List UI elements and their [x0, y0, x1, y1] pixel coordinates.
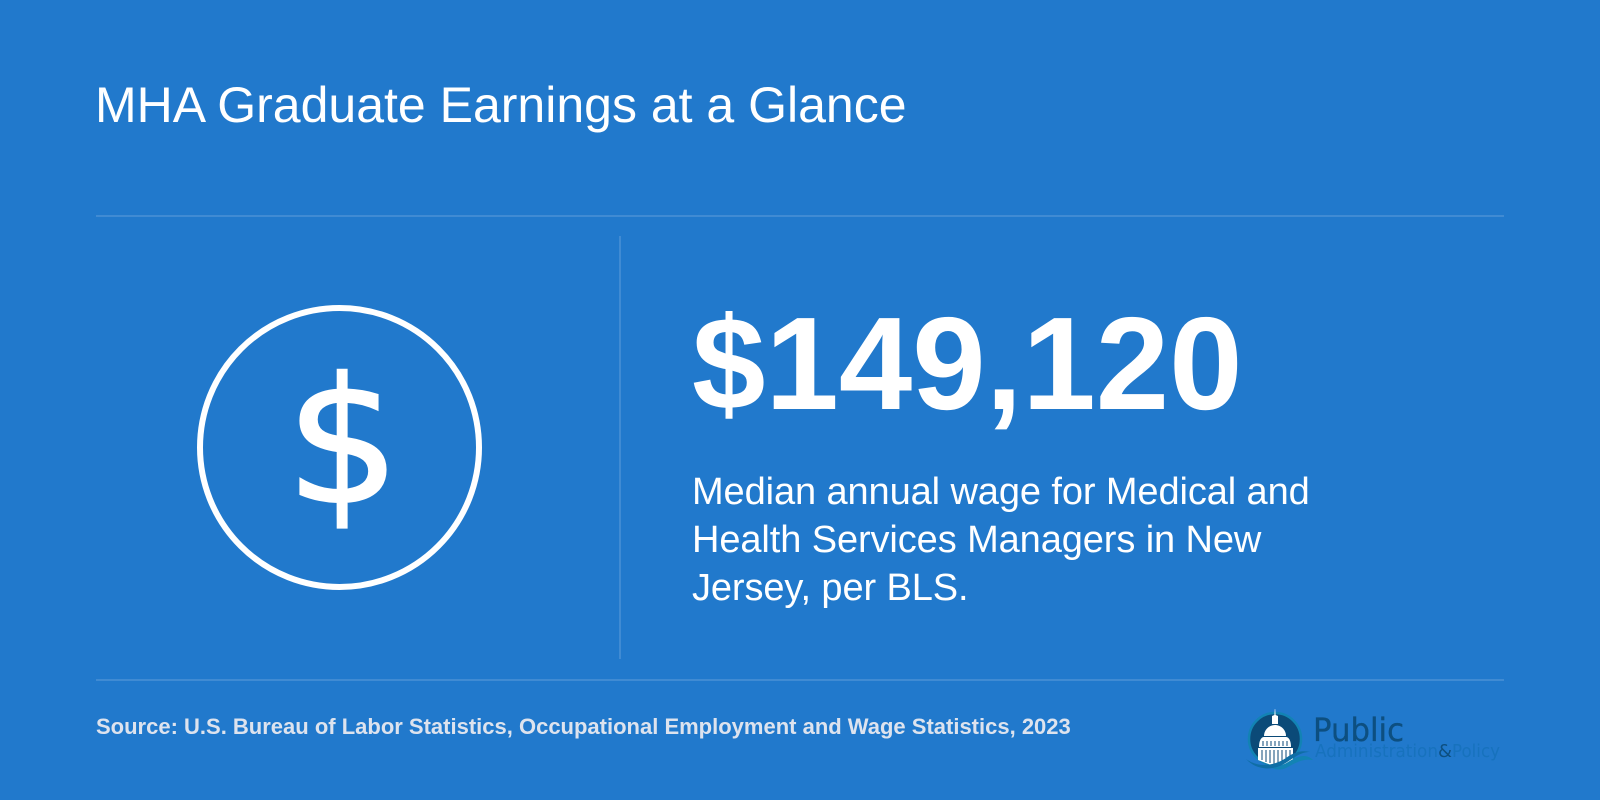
title: MHA Graduate Earnings at a Glance [95, 77, 907, 133]
logo ampersand: & [1438, 741, 1452, 762]
logo word: Public: Public [1313, 711, 1404, 749]
logo: Public Administration & Policy [1246, 709, 1500, 770]
icon: dollar sign in circle: $ [285, 340, 401, 543]
wage description: Jersey, per BLS. [692, 567, 968, 609]
wage description: Median annual wage for Medical and [692, 471, 1310, 513]
source note: Source: U.S. Bureau of Labor Statistics, Occupational Employment and Wage Statistics, 2023 [96, 714, 1071, 739]
big wage figure: $149,120 [692, 290, 1243, 437]
icon: capitol dome [1246, 709, 1313, 770]
wage description [692, 471, 1310, 609]
logo word: Administration: Administration [1315, 741, 1438, 762]
wage description: Health Services Managers in New [692, 519, 1261, 561]
logo word: Policy: Policy [1452, 741, 1500, 762]
icon: dollar sign in circle [197, 305, 482, 590]
